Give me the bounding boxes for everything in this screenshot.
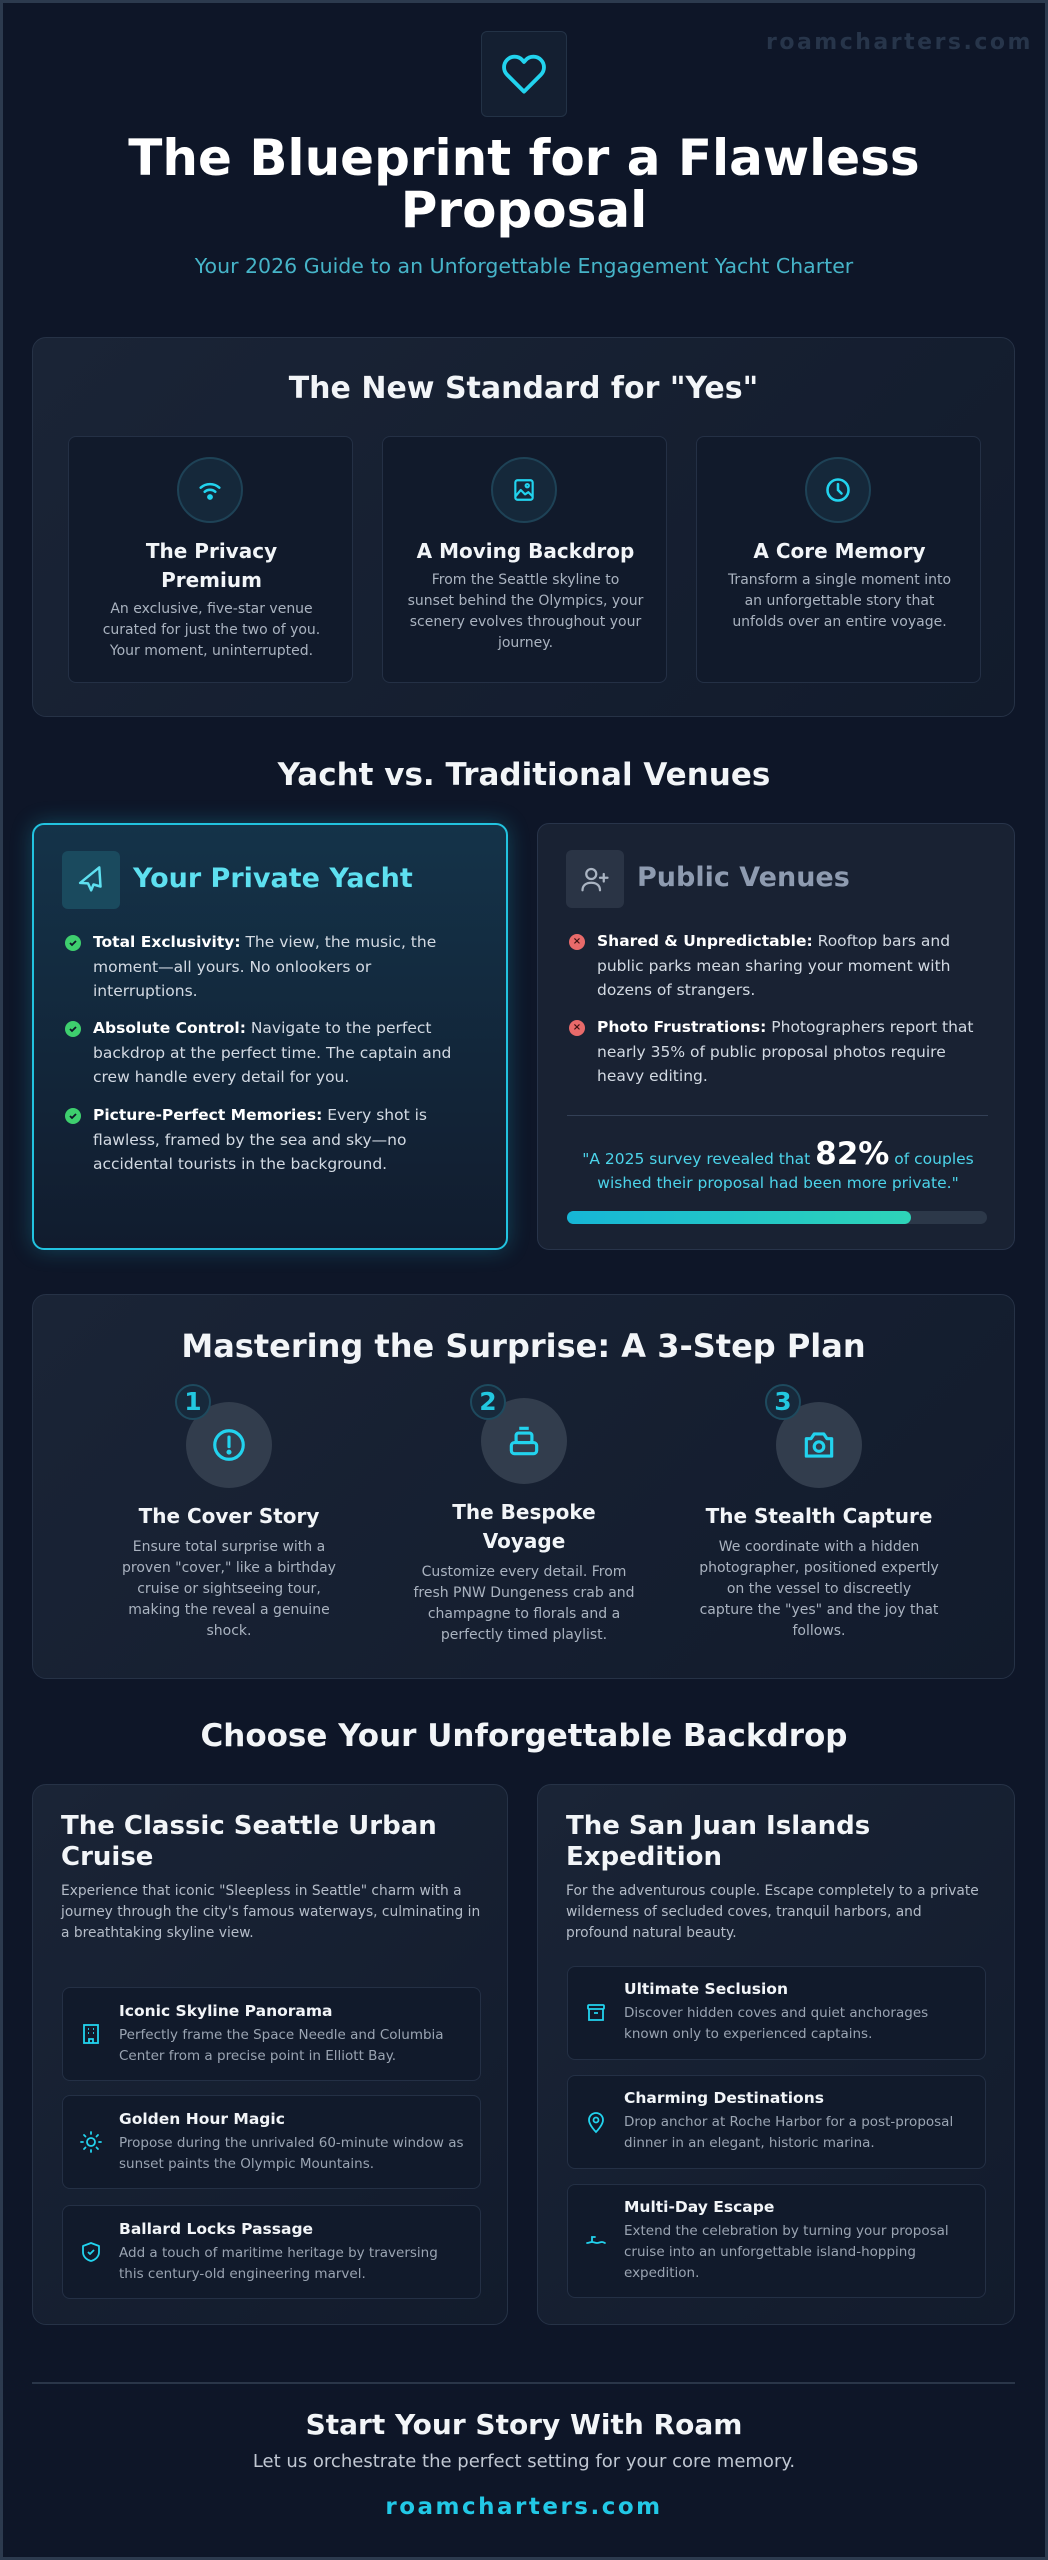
text: A Core Memory xyxy=(753,539,926,563)
item: Absolute Control: Navigate to the perfect backdrop at the perfect time. The captain and crew handle every detail for you. xyxy=(93,1019,451,1086)
text: An exclusive, five-star venue curated for just the two of you. Your moment, uninterrupted. xyxy=(103,601,320,659)
desc: For the adventurous couple. Escape completely to a private wilderness of secluded coves, tranquil harbors, and profound natural beauty. xyxy=(566,1883,979,1941)
text: Voyage xyxy=(483,1529,565,1553)
progress bar xyxy=(567,1211,987,1224)
panel: 3-step plan: 2 xyxy=(479,1387,497,1416)
item: golden hour: Golden Hour Magic xyxy=(119,2110,285,2128)
text: Premium xyxy=(161,568,262,592)
panel: new standard xyxy=(32,337,1015,717)
icon: heart xyxy=(481,31,567,117)
text: Customize every detail. From fresh PNW Dungeness crab and champagne to florals and a perfectly timed playlist. xyxy=(413,1564,635,1643)
item: multi-day: Multi-Day Escape xyxy=(624,2198,774,2216)
panel: san juan xyxy=(537,1784,1015,2325)
footer heading: Start Your Story With Roam xyxy=(306,2408,742,2441)
desc: Experience that iconic "Sleepless in Seattle" charm with a journey through the city's famous waterways, culminating in a breathtaking skyline view. xyxy=(61,1883,480,1941)
panel: public venues xyxy=(537,823,1015,1250)
subtitle: Your 2026 Guide to an Unforgettable Engagement Yacht Charter xyxy=(195,254,853,278)
item: skyline xyxy=(62,1987,481,2081)
card: core memory xyxy=(696,436,981,683)
panel: public venues: × xyxy=(573,936,581,947)
item: seclusion: Ultimate Seclusion xyxy=(624,1980,788,1998)
heading: yacht vs: Yacht vs. Traditional Venues xyxy=(278,757,770,793)
item: skyline: Iconic Skyline Panorama xyxy=(119,2002,332,2020)
step 3 xyxy=(699,1384,939,1639)
panel: public venues: × xyxy=(573,1022,581,1033)
panel: private yacht xyxy=(32,823,508,1250)
title: Proposal xyxy=(401,181,647,239)
step 1: 1 xyxy=(184,1387,202,1416)
text: The Cover Story xyxy=(139,1504,319,1528)
item: ballard: Ballard Locks Passage xyxy=(119,2220,313,2238)
card: privacy xyxy=(68,436,353,683)
item: Shared & Unpredictable: Rooftop bars and public parks mean sharing your moment with dozens of strangers. xyxy=(597,932,951,999)
panel: 3-step plan xyxy=(32,1294,1015,1679)
title xyxy=(128,129,920,239)
title: Public Venues xyxy=(637,862,850,893)
text xyxy=(728,539,951,630)
text: The Bespoke xyxy=(452,1500,596,1524)
text: We coordinate with a hidden photographer, positioned expertly on the vessel to discreetly capture the "yes" and the joy that follows. xyxy=(699,1539,939,1639)
text: From the Seattle skyline to sunset behind the Olympics, your scenery evolves throughout your journey. xyxy=(408,572,643,651)
item: seclusion: Discover hidden coves and quiet anchorages known only to experienced captains. xyxy=(624,2005,928,2042)
text: Ensure total surprise with a proven "cover," like a birthday cruise or sightseeing tour, making the reveal a genuine shock. xyxy=(122,1539,336,1639)
title: The Classic Seattle Urban Cruise xyxy=(61,1811,437,1872)
item: Picture-Perfect Memories: Every shot is flawless, framed by the sea and sky—no accidental tourists in the background. xyxy=(93,1106,427,1173)
card: backdrop xyxy=(382,436,667,683)
item: Total Exclusivity: The view, the music, the moment—all yours. No onlookers or interruptions. xyxy=(93,933,436,1000)
list xyxy=(65,933,451,1173)
icon: alert xyxy=(186,1402,272,1488)
title: The Blueprint for a Flawless xyxy=(128,129,920,187)
item: ballard: Add a touch of maritime heritage by traversing this century-old engineering marvel. xyxy=(119,2245,438,2282)
heading: Mastering the Surprise: A 3-Step Plan xyxy=(181,1327,866,1365)
heading: backdrop: Choose Your Unforgettable Backdrop xyxy=(201,1718,847,1754)
icon: image xyxy=(491,457,557,523)
icon: camera xyxy=(776,1402,862,1488)
item: destinations: Drop anchor at Roche Harbor for a post-proposal dinner in an elegant, historic marina. xyxy=(624,2114,953,2151)
footer text: Let us orchestrate the perfect setting for your core memory. xyxy=(253,2451,795,2472)
item: skyline: Perfectly frame the Space Needle and Columbia Center from a precise point in Elliott Bay. xyxy=(119,2027,444,2064)
heading: The New Standard for "Yes" xyxy=(289,371,758,406)
item: multi-day: Extend the celebration by turning your proposal cruise into an unforgettable island-hopping expedition. xyxy=(624,2223,949,2281)
item: Photo Frustrations: Photographers report that nearly 35% of public proposal photos require heavy editing. xyxy=(597,1018,974,1085)
panel: seattle xyxy=(32,1784,508,2325)
icon: clock xyxy=(805,457,871,523)
icon: send xyxy=(62,851,120,909)
item: multi-day xyxy=(567,2184,986,2298)
text xyxy=(413,1500,635,1643)
text: Transform a single moment into an unforgettable story that unfolds over an entire voyage. xyxy=(728,572,951,630)
step 3: 3 xyxy=(774,1387,792,1416)
item: destinations: Charming Destinations xyxy=(624,2089,824,2107)
item: golden hour xyxy=(62,2095,481,2189)
watermark: roamcharters.com xyxy=(766,30,1033,55)
icon: user plus xyxy=(566,850,624,908)
item: destinations xyxy=(567,2075,986,2169)
title: Your Private Yacht xyxy=(133,863,413,894)
text xyxy=(103,539,320,659)
step 2 xyxy=(413,1384,635,1643)
list xyxy=(569,932,974,1085)
step 1 xyxy=(122,1384,336,1639)
text: The Stealth Capture xyxy=(706,1504,932,1528)
title: The San Juan Islands Expedition xyxy=(566,1811,870,1872)
item: seclusion xyxy=(567,1966,986,2060)
stat quote: "A 2025 survey revealed that 82% of couples wished their proposal had been more private." xyxy=(582,1136,974,1192)
item: golden hour: Propose during the unrivaled 60-minute window as sunset paints the Olympic Mountains. xyxy=(119,2135,464,2172)
item: ballard xyxy=(62,2205,481,2299)
text: A Moving Backdrop xyxy=(417,539,634,563)
footer url: roamcharters.com xyxy=(385,2494,663,2520)
icon: wifi xyxy=(177,457,243,523)
icon: cake xyxy=(481,1398,567,1484)
text: The Privacy xyxy=(146,539,277,563)
